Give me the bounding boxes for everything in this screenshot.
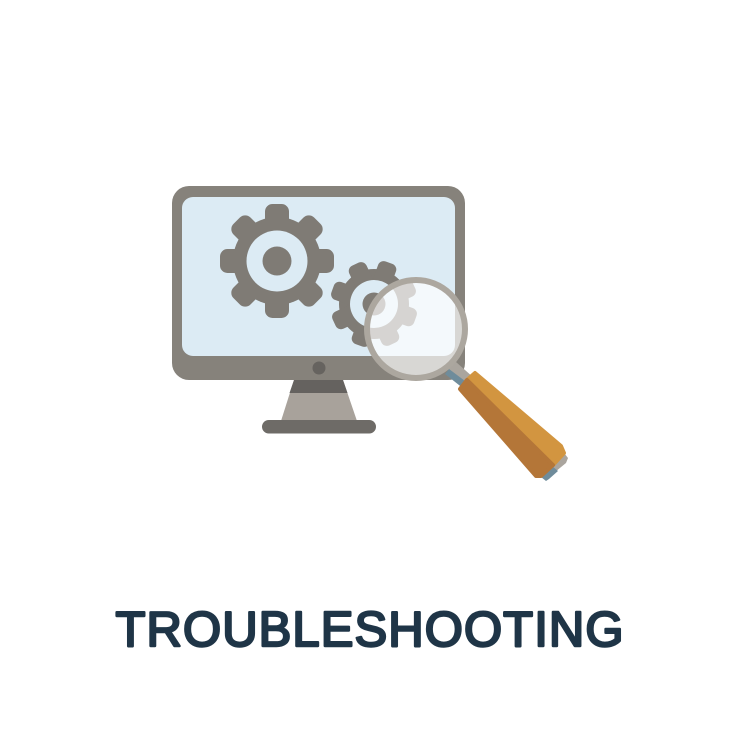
magnifier glass <box>370 283 462 375</box>
title: TROUBLESHOOTING <box>116 603 624 657</box>
icon: magnifying glass <box>360 275 568 481</box>
magnifier neck <box>445 362 474 389</box>
monitor stand <box>262 380 376 434</box>
icon: monitor <box>172 186 465 434</box>
icon: small gear <box>329 259 419 349</box>
troubleshooting infographic <box>115 186 622 648</box>
magnifier rim <box>367 280 465 378</box>
magnifier handle <box>460 373 564 476</box>
magnifier end cap <box>541 449 568 481</box>
monitor button <box>312 362 326 374</box>
icon: large gear <box>220 204 334 318</box>
monitor screen <box>182 197 455 356</box>
monitor bezel <box>172 186 465 380</box>
